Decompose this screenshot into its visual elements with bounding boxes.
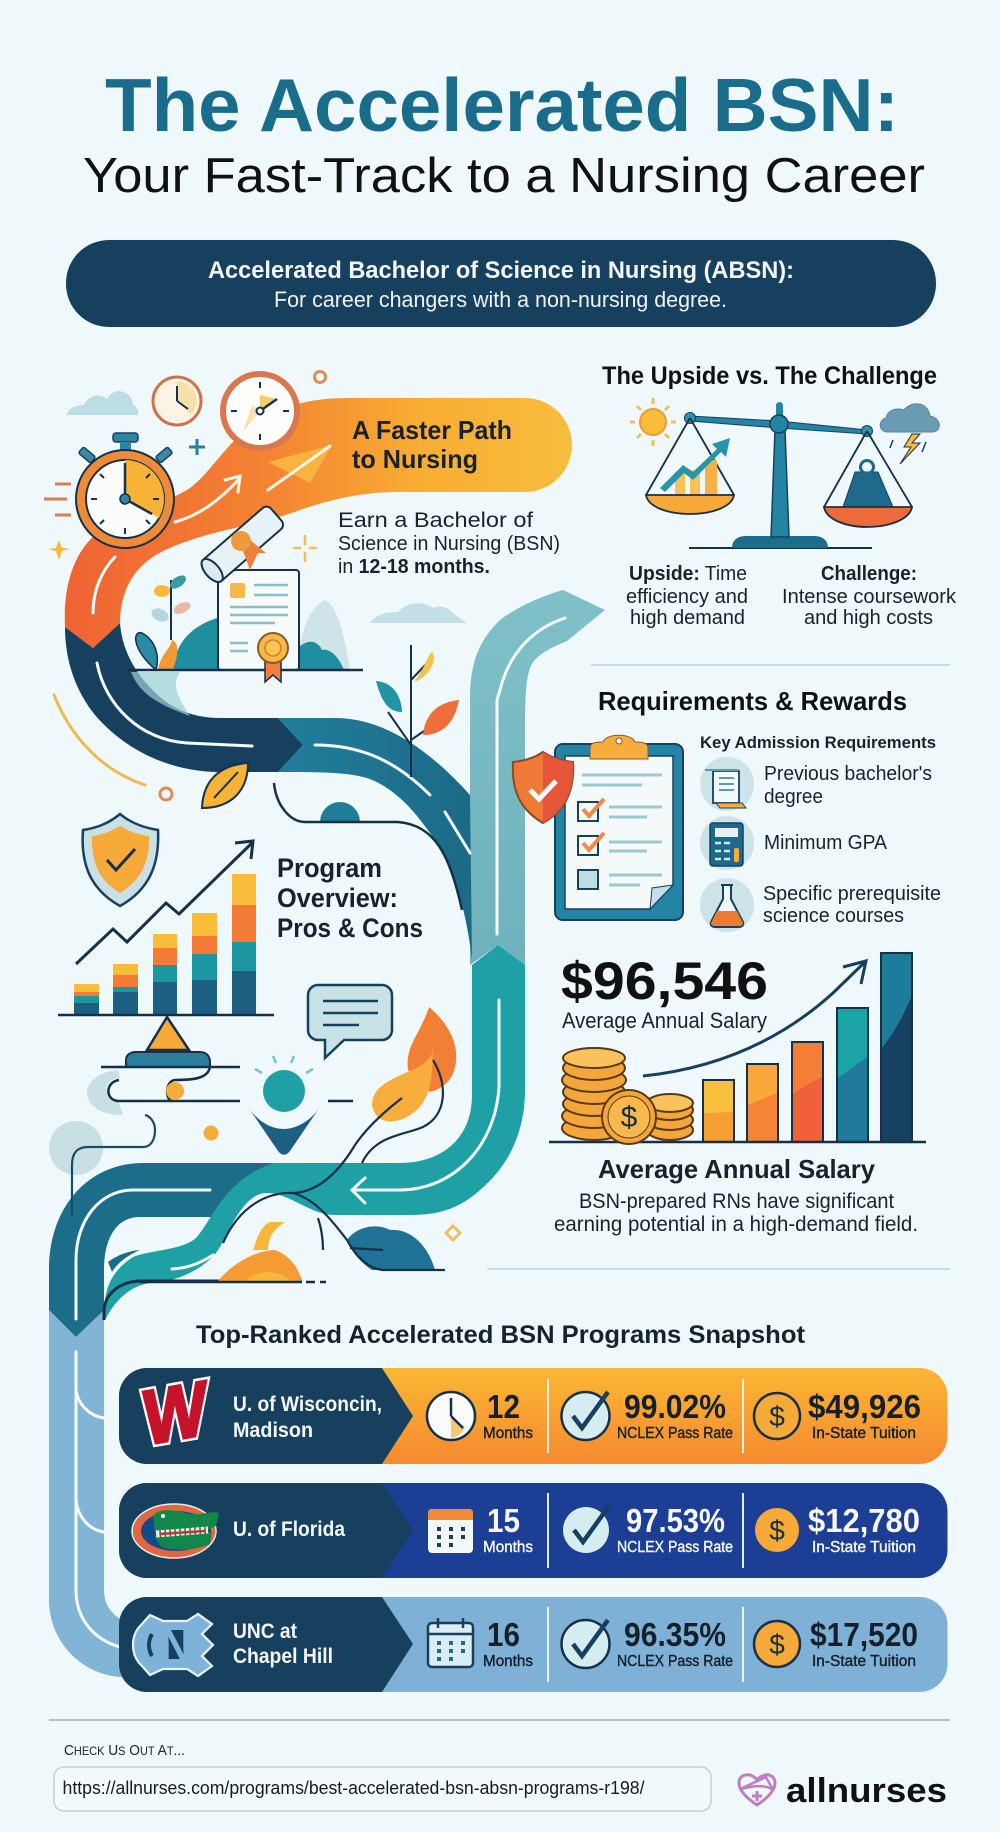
- icon: stopwatch: [44, 433, 174, 548]
- text: challenge: [782, 562, 957, 629]
- text: average annual salary: Average Annual Salary: [598, 1154, 876, 1184]
- footer: url box: [54, 1767, 711, 1811]
- heading: a faster path to nursing: [352, 415, 512, 474]
- icon: clouds and sparkles: [48, 372, 467, 800]
- requirement: minimum GPA: [700, 816, 888, 870]
- icon: sun: [630, 398, 676, 446]
- icon: dollar coin: $: [769, 1401, 785, 1432]
- icon: coin stacks: $: [621, 1101, 638, 1134]
- icon: calendar: [428, 1509, 473, 1553]
- heading: program overview: [277, 853, 423, 943]
- requirement: bachelor's degree: Previous bachelor's: [764, 763, 932, 785]
- requirement: prerequisite science courses: [700, 878, 941, 932]
- row: UNC chapel hill: $17,520: [810, 1616, 918, 1653]
- icon: shield with check: [83, 814, 158, 906]
- text: challenge: and high costs: [804, 606, 933, 629]
- logo: Wisconsin W: W: [143, 1365, 208, 1462]
- row: UNC chapel hill: Chapel Hill: [233, 1645, 333, 1668]
- heading: requirements and rewards: Requirements & Rewards: [598, 686, 907, 716]
- row: university of florida: NCLEX Pass Rate: [617, 1539, 733, 1556]
- salary figure: Average Annual Salary: [562, 1008, 767, 1033]
- banner: definition of ABSN: For career changers with a non-nursing degree.: [274, 287, 727, 312]
- logo: allnurses: allnurses: [786, 1772, 947, 1810]
- illustration: diploma scene: [128, 504, 363, 716]
- icon: clock: [427, 1392, 475, 1440]
- illustration: branch with leaves: [376, 645, 459, 777]
- logo: UNC interlocking NC: N: [160, 1620, 192, 1673]
- footer: url box: https://allnurses.com/programs/best-accelerated-bsn-absn-programs-r198/: [62, 1778, 644, 1798]
- row: university of wisconsin: Months: [483, 1425, 533, 1442]
- icon: storm cloud: [880, 404, 939, 464]
- icon: fallen leaf: [202, 763, 248, 808]
- row: university of florida: 15: [487, 1502, 520, 1539]
- row: UNC chapel hill: 16: [487, 1616, 520, 1653]
- icon: dollar coin: $: [769, 1629, 785, 1660]
- illustration: balance scale: [646, 402, 912, 548]
- text: challenge: Challenge:: [821, 562, 917, 585]
- text: average annual salary: earning potential in a high-demand field.: [554, 1213, 918, 1236]
- row: university of wisconsin: 99.02%: [624, 1388, 726, 1425]
- icon: orange shield: [513, 752, 573, 823]
- icon: dollar coin: [754, 1393, 800, 1439]
- row: university of florida: In-State Tuition: [812, 1539, 916, 1556]
- row: university of wisconsin: [119, 1365, 948, 1464]
- row: university of wisconsin: 12: [487, 1388, 520, 1425]
- text: average annual salary: BSN-prepared RNs have significant: [579, 1190, 894, 1213]
- heading: a faster path to nursing: A Faster Path: [352, 415, 512, 445]
- text: upside: [626, 562, 748, 629]
- banner: definition of ABSN: Accelerated Bachelor of Science in Nursing (ABSN):: [208, 257, 794, 284]
- row: university of wisconsin: NCLEX Pass Rate: [617, 1425, 733, 1442]
- row: university of florida: U. of Florida: [233, 1518, 345, 1541]
- requirement: minimum GPA: Minimum GPA: [764, 832, 888, 854]
- heading: a faster path to nursing: to Nursing: [352, 444, 478, 474]
- icon: dollar coin: $: [769, 1515, 785, 1546]
- icon: calendar: [428, 1618, 473, 1667]
- icon: coin stacks: [562, 1048, 693, 1144]
- row: UNC chapel hill: UNC at: [233, 1620, 297, 1643]
- title: [83, 63, 925, 203]
- banner: definition of ABSN: [66, 240, 936, 327]
- row: UNC chapel hill: [119, 1597, 948, 1692]
- requirement: prerequisite science courses: Specific prerequisite: [763, 883, 941, 905]
- salary figure: $96,546: [561, 952, 768, 1011]
- text: earn a bachelor: Science in Nursing (BSN): [338, 532, 560, 555]
- title: Your Fast-Track to a Nursing Career: [83, 149, 925, 203]
- text: average annual salary: [554, 1154, 918, 1236]
- heading: program overview: Pros & Cons: [277, 913, 423, 943]
- heading: program overview: Program: [277, 853, 382, 883]
- row: UNC chapel hill: NCLEX Pass Rate: [617, 1653, 733, 1670]
- title: The Accelerated BSN:: [105, 63, 899, 147]
- illustration: abstract balance shapes: [49, 1017, 353, 1217]
- arrows on the orange road: [175, 445, 332, 522]
- text: earn a bachelor: Earn a Bachelor of: [338, 509, 533, 532]
- text: upside: high demand: [630, 606, 745, 629]
- text: earn a bachelor: in 12-18 months.: [338, 555, 490, 578]
- row: UNC chapel hill: 96.35%: [624, 1616, 726, 1653]
- chart: stacked bars with trend arrow: [58, 841, 274, 1015]
- icon: check: [562, 1620, 610, 1668]
- heading: upside vs challenge: The Upside vs. The Challenge: [602, 362, 937, 390]
- logo: UNC interlocking NC: [133, 1614, 213, 1676]
- winding road illustration: [49, 398, 605, 1677]
- icon: small clock: [153, 377, 201, 425]
- row: university of florida: [119, 1483, 948, 1578]
- requirement: bachelor's degree: [700, 757, 932, 811]
- illustration: flame: [362, 1007, 456, 1163]
- row: university of florida: Months: [483, 1539, 533, 1556]
- icon: check: [563, 1506, 609, 1553]
- row: university of wisconsin: $49,926: [808, 1388, 921, 1425]
- thin connector line with mound: [274, 783, 462, 910]
- row: UNC chapel hill: Months: [483, 1653, 533, 1670]
- icon: dollar coin: [754, 1621, 800, 1667]
- icon: speech bubble: [308, 985, 392, 1058]
- row: university of florida: 97.53%: [626, 1502, 725, 1539]
- icon: large clock: [223, 374, 297, 448]
- icon: dollar coin: [755, 1508, 799, 1552]
- salary figure: [561, 952, 768, 1033]
- heading: top-ranked programs: Top-Ranked Accelerated BSN Programs Snapshot: [196, 1321, 806, 1349]
- row: university of wisconsin: In-State Tuition: [812, 1425, 916, 1442]
- icon: clipboard checklist: [555, 735, 683, 920]
- illustration: mound, leaf and curves: [140, 1098, 460, 1282]
- logo: Wisconsin W: W: [143, 1365, 208, 1462]
- row: university of wisconsin: U. of Wisconcin,: [233, 1393, 382, 1416]
- text: key admission requirements: Key Admission Requirements: [700, 733, 936, 752]
- text: earn a bachelor: [338, 509, 560, 578]
- row: UNC chapel hill: In-State Tuition: [812, 1653, 916, 1670]
- text: upside: efficiency and: [626, 585, 748, 608]
- row: university of wisconsin: Madison: [233, 1419, 313, 1442]
- heading: program overview: Overview:: [277, 883, 398, 913]
- row: university of florida: $12,780: [808, 1502, 920, 1539]
- text: upside: Upside: Time: [629, 562, 747, 585]
- footer: check us out: CHECK US OUT AT...: [64, 1742, 185, 1759]
- requirement: prerequisite science courses: science courses: [763, 905, 904, 927]
- icon: check: [562, 1392, 610, 1440]
- chart: rising salary bars: [549, 953, 926, 1142]
- text: challenge: Intense coursework: [782, 585, 957, 608]
- logo: Florida gator: [132, 1504, 219, 1558]
- requirement: bachelor's degree: degree: [764, 786, 823, 808]
